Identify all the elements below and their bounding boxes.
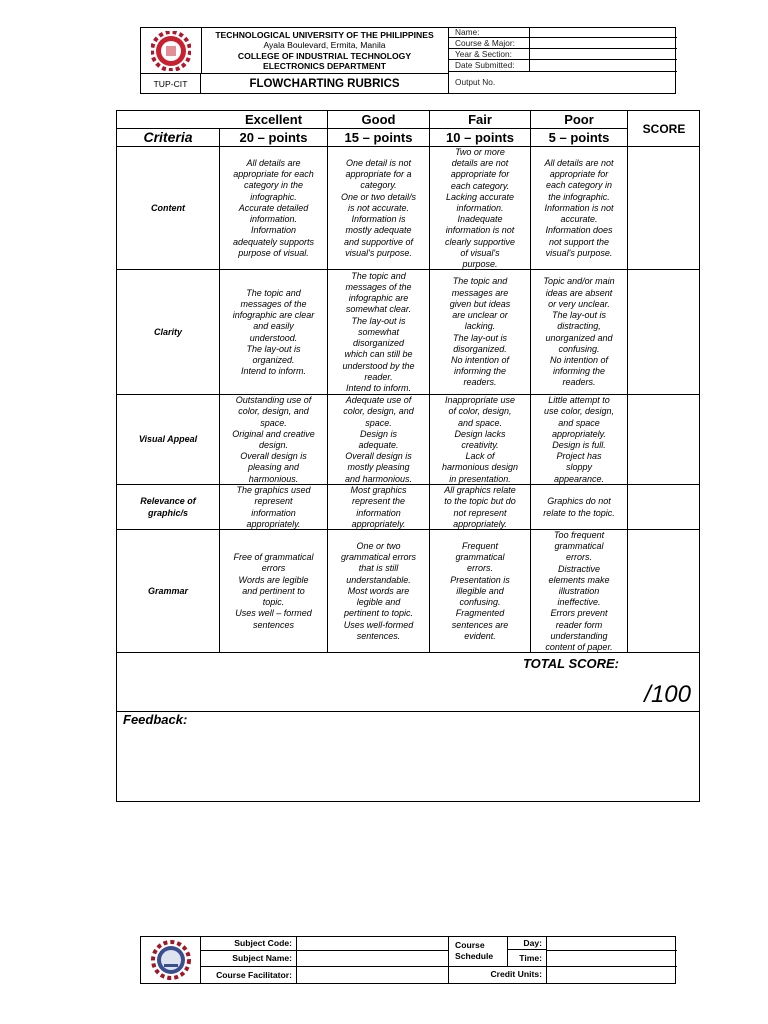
row: content: appropriate for each bbox=[233, 169, 314, 179]
row: relevance: not represent bbox=[453, 508, 507, 518]
row: grammar: illustration bbox=[559, 586, 599, 596]
university heading: COLLEGE OF INDUSTRIAL TECHNOLOGY bbox=[238, 50, 411, 60]
row: visual appeal: space. bbox=[365, 418, 392, 428]
row: clarity: informing the bbox=[454, 366, 506, 376]
row: visual appeal: harmonious design bbox=[442, 462, 518, 472]
row: grammar: errors. bbox=[467, 563, 493, 573]
row: grammar: elements make bbox=[548, 575, 610, 585]
row: visual appeal bbox=[117, 394, 699, 485]
row: content: clearly supportive bbox=[445, 237, 515, 247]
row: clarity: understood. bbox=[250, 332, 297, 342]
row: grammar: that is still bbox=[359, 563, 398, 573]
footer block: Day: bbox=[523, 938, 542, 948]
row: visual appeal: color, design, and bbox=[343, 406, 414, 416]
row: visual appeal: and space. bbox=[458, 418, 502, 428]
row: content: One or two detail/s bbox=[341, 192, 416, 202]
row: grammar: Distractive bbox=[558, 564, 600, 574]
row: relevance: Relevance of bbox=[140, 496, 196, 506]
row: visual appeal: Adequate use of bbox=[346, 395, 411, 405]
rubric table: Poor bbox=[564, 112, 594, 127]
row: visual appeal: space. bbox=[260, 418, 287, 428]
row: visual appeal: harmonious. bbox=[249, 474, 298, 484]
total score: /100 bbox=[644, 681, 691, 708]
row: grammar: legible and bbox=[357, 597, 400, 607]
row: visual appeal: Visual Appeal bbox=[139, 434, 197, 444]
row: grammar: Errors prevent bbox=[550, 608, 608, 618]
row: clarity: No intention of bbox=[451, 355, 509, 365]
rubric table: Fair bbox=[468, 112, 492, 127]
row: grammar: grammatical bbox=[554, 541, 604, 551]
row: content: Information is bbox=[351, 214, 406, 224]
row: relevance: relate to the topic. bbox=[543, 508, 615, 518]
row: clarity: readers. bbox=[562, 377, 596, 387]
row: grammar: One or two bbox=[356, 541, 400, 551]
row: grammar: Frequent bbox=[462, 541, 498, 551]
row: relevance: The graphics used bbox=[236, 485, 311, 495]
row: visual appeal: Little attempt to bbox=[548, 395, 610, 405]
row: grammar: content of paper. bbox=[545, 642, 613, 652]
row: content: purpose. bbox=[462, 259, 498, 269]
row: clarity: which can still be bbox=[344, 349, 413, 359]
row: content: Information is not bbox=[544, 203, 614, 213]
title: FLOWCHARTING RUBRICS bbox=[249, 78, 400, 90]
row: visual appeal: and harmonious. bbox=[345, 474, 412, 484]
row: content: Two or more bbox=[455, 147, 505, 157]
row: grammar: pertinent to topic. bbox=[344, 608, 413, 618]
row: content: visual's purpose. bbox=[345, 248, 412, 258]
row: content: accurate. bbox=[560, 214, 598, 224]
row: visual appeal: creativity. bbox=[461, 440, 499, 450]
row: clarity: No intention of bbox=[550, 355, 608, 365]
row: content: appropriate for bbox=[550, 169, 608, 179]
row: grammar: understanding bbox=[550, 631, 608, 641]
row: content: details are not bbox=[452, 158, 508, 168]
student fields: Date Submitted: bbox=[455, 60, 514, 70]
row: clarity: messages are bbox=[452, 288, 508, 298]
row: content: information is not bbox=[446, 225, 514, 235]
row: grammar: sentences. bbox=[357, 631, 400, 641]
row: grammar: Fragmented bbox=[456, 608, 504, 618]
row: content: visual's purpose. bbox=[546, 248, 612, 258]
row: clarity: given but ideas bbox=[450, 299, 510, 309]
row: content: All details are not bbox=[544, 158, 614, 168]
footer block: Subject Code: bbox=[234, 938, 292, 948]
university heading bbox=[215, 30, 434, 71]
row: visual appeal: pleasing and bbox=[248, 462, 299, 472]
row: visual appeal: design. bbox=[259, 440, 288, 450]
row: clarity: messages of the bbox=[240, 299, 307, 309]
row: relevance: appropriately. bbox=[453, 519, 507, 529]
rubric table: 10 – points bbox=[446, 130, 514, 144]
header row: Excellent bbox=[245, 112, 302, 127]
row: content: infographic. bbox=[250, 192, 297, 202]
row: relevance: graphic/s bbox=[148, 508, 188, 518]
footer block: Credit Units: bbox=[490, 969, 542, 979]
row: grammar: ineffective. bbox=[557, 597, 601, 607]
row: content: Lacking accurate bbox=[446, 192, 514, 202]
row: content: each category in bbox=[546, 180, 612, 190]
row: content: Information bbox=[251, 225, 296, 235]
row: clarity: The lay-out is bbox=[246, 344, 300, 354]
row: clarity: or very unclear. bbox=[548, 299, 610, 309]
row: relevance: information bbox=[356, 508, 401, 518]
row: visual appeal: mostly pleasing bbox=[347, 462, 410, 472]
row: grammar: errors bbox=[262, 563, 285, 573]
logo: footer seal bbox=[151, 940, 191, 980]
row: relevance: All graphics relate bbox=[444, 485, 516, 495]
row: visual appeal: of color, design, bbox=[448, 406, 512, 416]
row: grammar: Words are legible bbox=[238, 575, 309, 585]
row: visual appeal: in presentation. bbox=[449, 474, 511, 484]
row: content: One detail is not bbox=[346, 158, 411, 168]
row: relevance: to the topic but do bbox=[444, 496, 516, 506]
row: grammar: grammatical errors bbox=[341, 552, 416, 562]
row: visual appeal: color, design, and bbox=[238, 406, 309, 416]
row: content: of visual's bbox=[460, 248, 500, 258]
row: clarity: readers. bbox=[463, 377, 496, 387]
footer block: Time: bbox=[519, 953, 542, 963]
student fields: Course & Major: bbox=[455, 38, 515, 48]
row: clarity: Clarity bbox=[154, 327, 182, 337]
row: visual appeal: use color, design, bbox=[544, 406, 614, 416]
rubric table bbox=[116, 110, 700, 802]
rubric table: 15 – points bbox=[345, 130, 412, 144]
row: clarity: understood by the bbox=[342, 360, 415, 370]
row: content: Information does bbox=[545, 225, 613, 235]
row: clarity: are unclear or bbox=[452, 310, 508, 320]
row: content: Accurate detailed bbox=[239, 203, 308, 213]
footer block: Course Facilitator: bbox=[216, 970, 292, 980]
row: grammar: and pertinent to bbox=[242, 586, 305, 596]
row: content: category in the bbox=[244, 180, 303, 190]
row: content: not support the bbox=[549, 236, 609, 246]
university heading: ELECTRONICS DEPARTMENT bbox=[263, 61, 386, 71]
row: grammar: sentences bbox=[253, 620, 294, 630]
row: relevance: represent the bbox=[352, 496, 405, 506]
row: visual appeal: Overall design is bbox=[240, 451, 307, 461]
row: content: is not accurate. bbox=[348, 203, 409, 213]
row: relevance bbox=[117, 484, 699, 530]
row: grammar bbox=[117, 529, 699, 653]
row: grammar: illegible and bbox=[456, 586, 504, 596]
student fields: Year & Section: bbox=[455, 49, 512, 59]
row: clarity: The lay-out is bbox=[453, 332, 507, 342]
row: clarity: The topic and bbox=[351, 271, 406, 281]
header row bbox=[220, 111, 328, 128]
TUP-CIT: TUP-CIT bbox=[154, 79, 187, 89]
row: content: appropriate for bbox=[451, 169, 509, 179]
total score bbox=[117, 652, 699, 712]
row: content: and supportive of bbox=[344, 236, 413, 246]
row: content: each category. bbox=[451, 180, 509, 190]
row: clarity: ideas are absent bbox=[546, 288, 612, 298]
row: clarity: messages of the bbox=[345, 282, 412, 292]
row: clarity: distracting, bbox=[557, 321, 601, 331]
row: clarity: infographic are clear bbox=[233, 310, 314, 320]
row: visual appeal: appropriately. bbox=[552, 429, 606, 439]
row: clarity: lacking. bbox=[465, 321, 495, 331]
row: visual appeal: Project has bbox=[556, 451, 602, 461]
row: content: purpose of visual. bbox=[238, 248, 309, 258]
footer block: Schedule bbox=[455, 951, 493, 961]
row: grammar: confusing. bbox=[459, 597, 500, 607]
row: clarity: somewhat clear. bbox=[346, 304, 411, 314]
rubric table: Criteria bbox=[143, 129, 193, 145]
row: relevance: information bbox=[251, 508, 296, 518]
row: grammar: understandable. bbox=[346, 575, 411, 585]
row: clarity: Intend to inform. bbox=[241, 366, 306, 376]
row: visual appeal: Original and creative bbox=[232, 429, 315, 439]
row: clarity: Intend to inform. bbox=[346, 383, 411, 393]
total score: TOTAL SCORE: bbox=[523, 656, 619, 671]
row: clarity: Topic and/or main bbox=[543, 276, 615, 286]
row: content: information. bbox=[250, 214, 297, 224]
logo: TUP gear bbox=[151, 31, 191, 71]
student fields bbox=[448, 27, 677, 94]
row: grammar: sentences are bbox=[452, 620, 508, 630]
row: clarity: The lay-out is bbox=[552, 310, 606, 320]
row: visual appeal: and space bbox=[558, 418, 600, 428]
footer block: Subject Name: bbox=[232, 953, 292, 963]
row: content: mostly adequate bbox=[345, 225, 412, 235]
row: grammar: Most words are bbox=[348, 586, 409, 596]
row: visual appeal: Lack of bbox=[465, 451, 495, 461]
row: content: All details are bbox=[246, 158, 301, 168]
title bbox=[201, 73, 448, 94]
row: visual appeal: Outstanding use of bbox=[236, 395, 311, 405]
header block bbox=[140, 27, 676, 94]
row: clarity: somewhat bbox=[358, 327, 399, 337]
feedback bbox=[117, 711, 699, 802]
row: visual appeal: appearance. bbox=[554, 474, 604, 484]
row: visual appeal: Inappropriate use bbox=[445, 395, 515, 405]
row: content: appropriate for a bbox=[345, 169, 412, 179]
student fields: Output No. bbox=[455, 77, 495, 87]
row: clarity: The lay-out is bbox=[351, 316, 406, 326]
row: grammar: Uses well-formed bbox=[344, 620, 413, 630]
row: grammar: grammatical bbox=[455, 552, 504, 562]
row: clarity: informing the bbox=[553, 366, 605, 376]
rubric table: 5 – points bbox=[549, 130, 609, 144]
row: visual appeal: Overall design is bbox=[345, 451, 412, 461]
TUP-CIT bbox=[141, 73, 201, 94]
row: grammar: Grammar bbox=[148, 586, 188, 596]
row: grammar: Free of grammatical bbox=[233, 552, 314, 562]
row: visual appeal: sloppy bbox=[566, 462, 592, 472]
row: content: adequately supports bbox=[233, 236, 314, 246]
row: clarity: and easily bbox=[253, 321, 294, 331]
footer block bbox=[140, 936, 676, 984]
row: visual appeal: adequate. bbox=[358, 440, 399, 450]
row: relevance: represent bbox=[254, 496, 292, 506]
row: clarity: disorganized bbox=[353, 338, 404, 348]
row: grammar: evident. bbox=[464, 631, 496, 641]
row: visual appeal: Design is full. bbox=[552, 440, 606, 450]
row: clarity: The topic and bbox=[453, 276, 507, 286]
feedback: Feedback: bbox=[123, 712, 187, 727]
row: clarity: unorganized and bbox=[545, 332, 613, 342]
row: grammar: reader form bbox=[556, 620, 602, 630]
rubric table: Good bbox=[362, 112, 395, 127]
row: clarity: disorganized. bbox=[453, 344, 507, 354]
student fields: Name: bbox=[455, 27, 479, 37]
row: clarity: organized. bbox=[252, 355, 294, 365]
row: grammar: Uses well – formed bbox=[235, 608, 312, 618]
footer block: Course bbox=[455, 940, 485, 950]
row: relevance: Most graphics bbox=[350, 485, 407, 495]
row: relevance: appropriately. bbox=[247, 519, 300, 529]
row: content: category. bbox=[360, 180, 397, 190]
row: content: Content bbox=[151, 203, 185, 213]
row: grammar: topic. bbox=[263, 597, 284, 607]
row: clarity: infographic are bbox=[349, 293, 408, 303]
row: content: the infographic. bbox=[548, 192, 610, 202]
row: grammar: errors. bbox=[566, 552, 592, 562]
row: content: Inadequate bbox=[457, 214, 503, 224]
row: content: information. bbox=[456, 203, 504, 213]
rubric table: SCORE bbox=[643, 122, 685, 136]
university heading: Ayala Boulevard, Ermita, Manila bbox=[263, 40, 386, 50]
row: clarity: The topic and bbox=[246, 288, 301, 298]
row: visual appeal: Design is bbox=[360, 429, 397, 439]
row: visual appeal: Design lacks bbox=[454, 429, 506, 439]
row: grammar: Too frequent bbox=[554, 530, 604, 540]
row: relevance: Graphics do not bbox=[547, 496, 611, 506]
row: clarity: reader. bbox=[364, 372, 393, 382]
rubric table: 20 – points bbox=[240, 130, 307, 144]
university heading: TECHNOLOGICAL UNIVERSITY OF THE PHILIPPINES bbox=[215, 30, 434, 40]
row: clarity bbox=[117, 269, 699, 395]
row: relevance: appropriately. bbox=[352, 519, 405, 529]
row: grammar: Presentation is bbox=[450, 575, 510, 585]
row: content bbox=[117, 146, 699, 270]
row: clarity: confusing. bbox=[558, 344, 600, 354]
